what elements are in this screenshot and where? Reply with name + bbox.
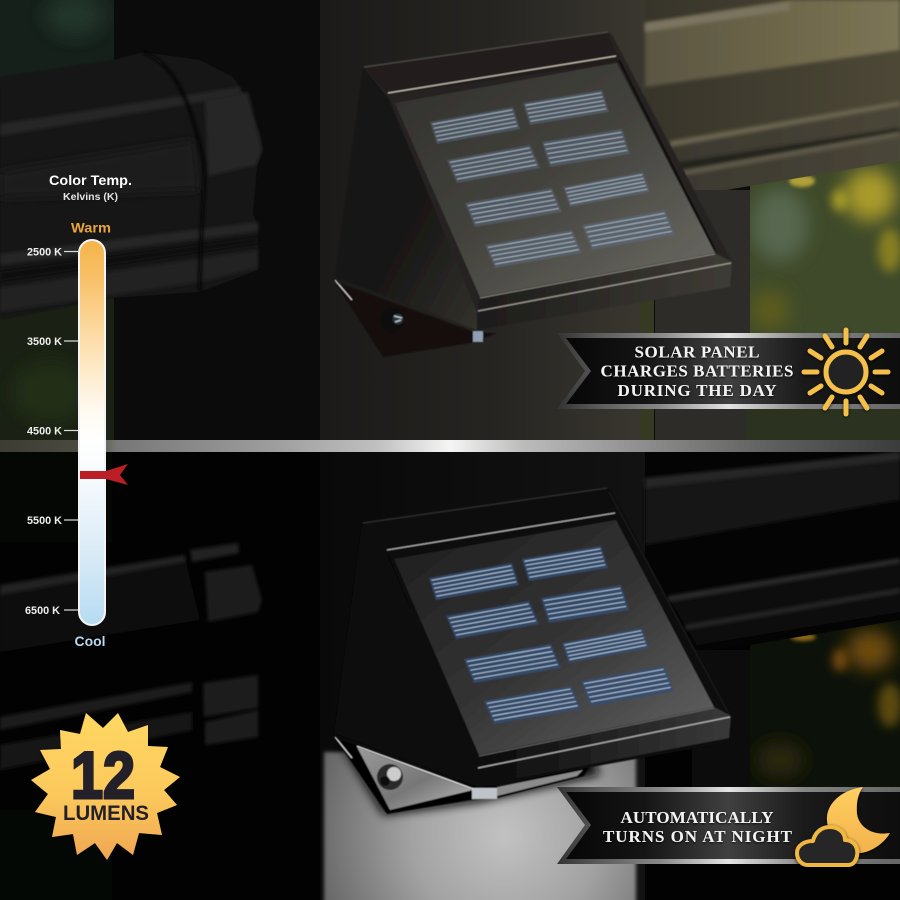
ribbon border [557, 333, 900, 409]
panel: solar light at night [334, 488, 731, 814]
housing frame [363, 32, 732, 330]
dark corner post [114, 0, 320, 440]
glass [395, 63, 715, 297]
lit underside strip [497, 770, 583, 796]
tick: 3500 K: 3500 K [27, 336, 62, 348]
heading: color temp: Color Temp. [49, 172, 132, 188]
icon: sun [804, 330, 888, 414]
callout: daytime ribbon [557, 330, 900, 414]
divider bar [0, 440, 900, 452]
top rim [363, 488, 618, 551]
front lip [476, 707, 731, 786]
lamp side housing [335, 67, 477, 330]
left railing with clamp [0, 52, 263, 320]
ribbon text: SOLAR PANEL [634, 342, 760, 362]
number: 12 [71, 738, 135, 812]
callout: night ribbon [557, 787, 900, 865]
ribbon text [603, 808, 793, 846]
tick: 5500 K: 5500 K [27, 515, 62, 527]
lit wall below the lamp [322, 750, 638, 900]
tick: 4500 K [27, 426, 78, 438]
front lip [477, 253, 732, 330]
unit: LUMENS [63, 802, 149, 825]
housing frame [362, 488, 731, 788]
badge: 12 lumens [31, 713, 180, 860]
right edge [619, 60, 715, 250]
icon: moon [827, 787, 890, 853]
solar cells [429, 546, 674, 724]
icon: cloud [797, 827, 857, 865]
screw [380, 308, 404, 332]
tick: 3500 K [27, 336, 78, 348]
right upper rail with sunlight haze [645, 0, 900, 195]
right window at night [750, 620, 900, 787]
ribbon fill [566, 338, 900, 404]
glass [394, 520, 714, 755]
left railing at night [0, 543, 262, 770]
clip [472, 788, 497, 799]
thermometer scale [25, 172, 132, 649]
tick: 6500 K: 6500 K [25, 605, 60, 617]
ribbon text: TURNS ON AT NIGHT [603, 827, 793, 846]
ribbon border [557, 787, 900, 864]
centre post at night [358, 452, 645, 900]
ribbon text: AUTOMATICALLY [620, 808, 774, 827]
ribbon text: DURING THE DAY [618, 381, 776, 400]
red temperature marker [80, 464, 128, 485]
right upper rail at night [645, 452, 900, 652]
right window foliage [750, 150, 900, 340]
centre post [320, 0, 645, 440]
label: warm: Warm [71, 220, 111, 236]
clip [473, 331, 483, 342]
mounting plate [335, 282, 497, 357]
lamp side housing [334, 523, 476, 786]
tick: 5500 K [27, 515, 78, 527]
label: cool: Cool [74, 633, 106, 649]
tick: 2500 K [27, 246, 78, 258]
right edge [609, 492, 729, 714]
tick: 4500 K: 4500 K [27, 426, 62, 438]
panel: night photo background [0, 452, 900, 900]
left window at night [0, 452, 112, 900]
tick: 6500 K [25, 605, 78, 617]
sub heading: kelvins: Kelvins (K) [63, 191, 118, 203]
ribbon text [600, 342, 794, 400]
panel: daytime photo background [0, 0, 900, 440]
starburst [31, 713, 180, 860]
right post at night [692, 650, 750, 795]
panel: solar light by day [335, 32, 732, 357]
ribbon text: CHARGES BATTERIES [600, 362, 794, 380]
thermometer bar [79, 240, 105, 625]
tick: 2500 K: 2500 K [27, 246, 62, 258]
solar cells [430, 90, 675, 268]
chrome screw [377, 764, 403, 790]
ribbon fill [566, 792, 900, 859]
top rim [364, 32, 620, 95]
left window foliage [0, 0, 114, 440]
right post [655, 190, 750, 440]
black plate border [335, 738, 590, 814]
lit mounting plate [357, 747, 473, 810]
